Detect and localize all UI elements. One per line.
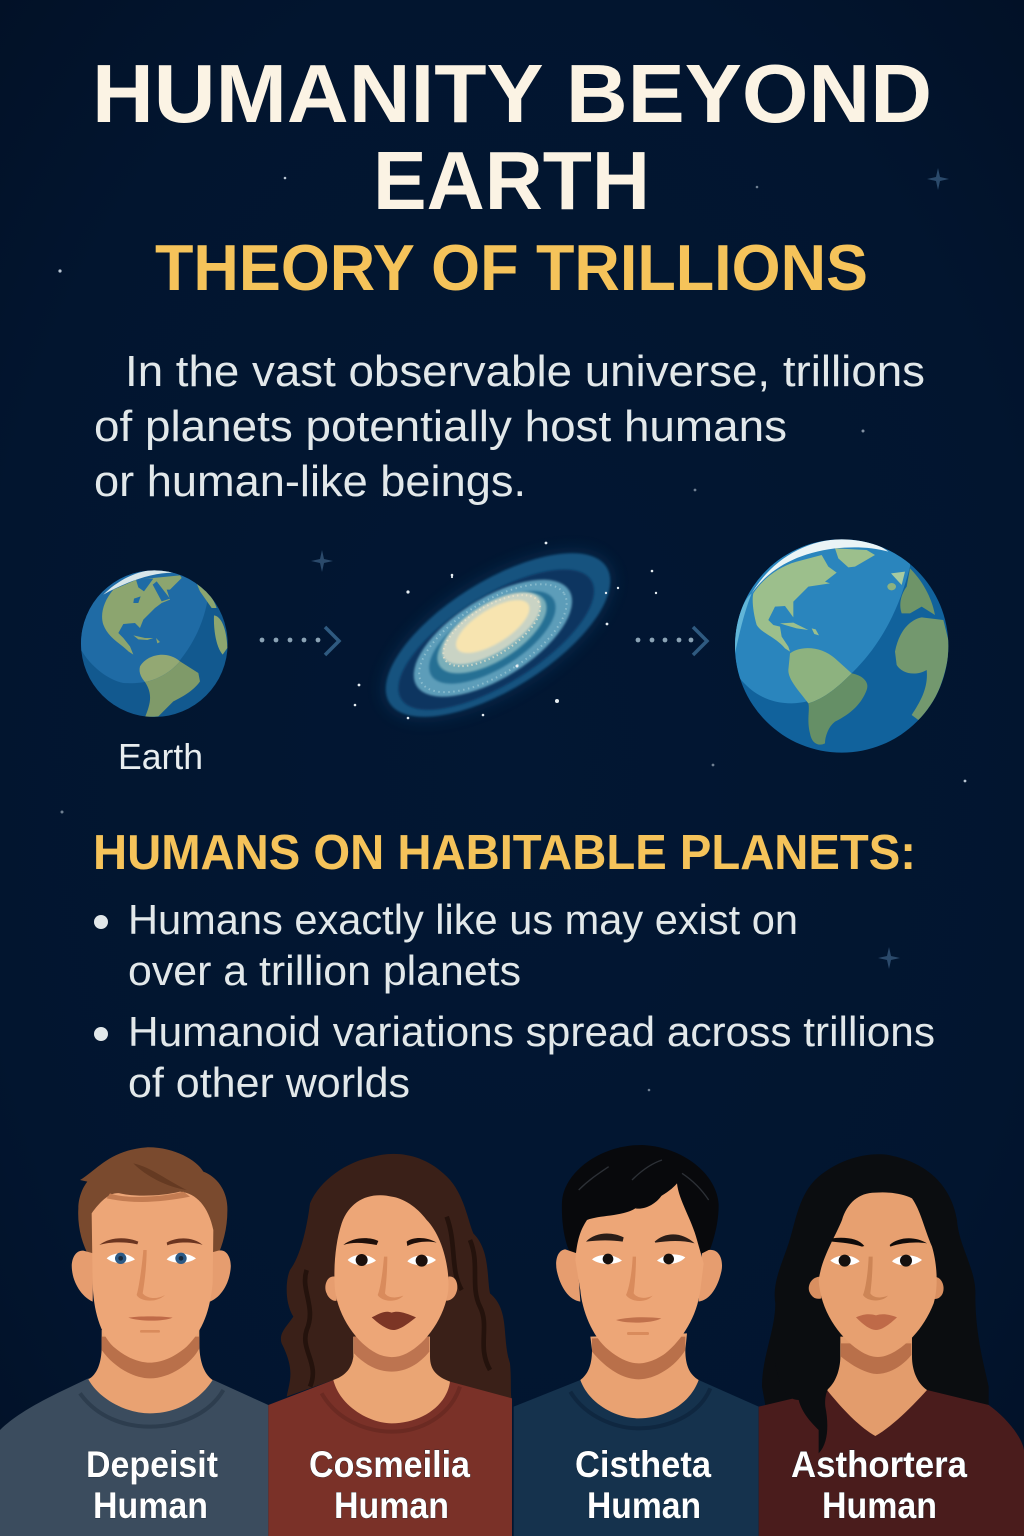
icon: large Earth [735, 539, 948, 753]
portrait: Cistheta human [514, 1145, 759, 1536]
portrait: Depeisit human [0, 1147, 268, 1536]
bullet list: Humanoid variations spread across trillions [128, 1008, 935, 1055]
portrait labels [86, 1444, 967, 1526]
icon: dotted arrow 1 [260, 627, 339, 655]
icon: dotted arrow 2 [636, 627, 707, 655]
icon: small Earth [81, 570, 228, 717]
background stars [58, 168, 966, 1091]
bullet list [94, 896, 935, 1106]
portrait: Asthortera human [759, 1154, 1024, 1536]
portrait labels: Cistheta [575, 1444, 711, 1485]
icon: spiral galaxy [353, 513, 657, 757]
intro paragraph [94, 347, 925, 506]
Earth label: Earth [118, 736, 203, 777]
title [92, 47, 932, 227]
intro paragraph: of planets potentially host humans [94, 402, 787, 451]
bullet list: of other worlds [128, 1059, 410, 1106]
portrait: Cosmeilia human [268, 1154, 512, 1536]
portrait labels: Cosmeilia [309, 1444, 470, 1485]
portrait labels: Human [587, 1485, 701, 1526]
portrait labels: Human [822, 1485, 937, 1526]
bullet list: Humans exactly like us may exist on [128, 896, 798, 943]
portrait labels: Human [93, 1485, 208, 1526]
title: EARTH [373, 134, 650, 227]
portrait labels: Human [334, 1485, 449, 1526]
portrait labels: Depeisit [86, 1444, 218, 1485]
title: HUMANITY BEYOND [92, 47, 932, 140]
portrait labels: Asthortera [791, 1444, 967, 1485]
section heading: HUMANS ON HABITABLE PLANETS: [93, 826, 916, 880]
intro paragraph: In the vast observable universe, trillions [125, 347, 925, 396]
bullet list: over a trillion planets [128, 947, 521, 994]
intro paragraph: or human-like beings. [94, 457, 526, 506]
subtitle: THEORY OF TRILLIONS [155, 231, 868, 304]
